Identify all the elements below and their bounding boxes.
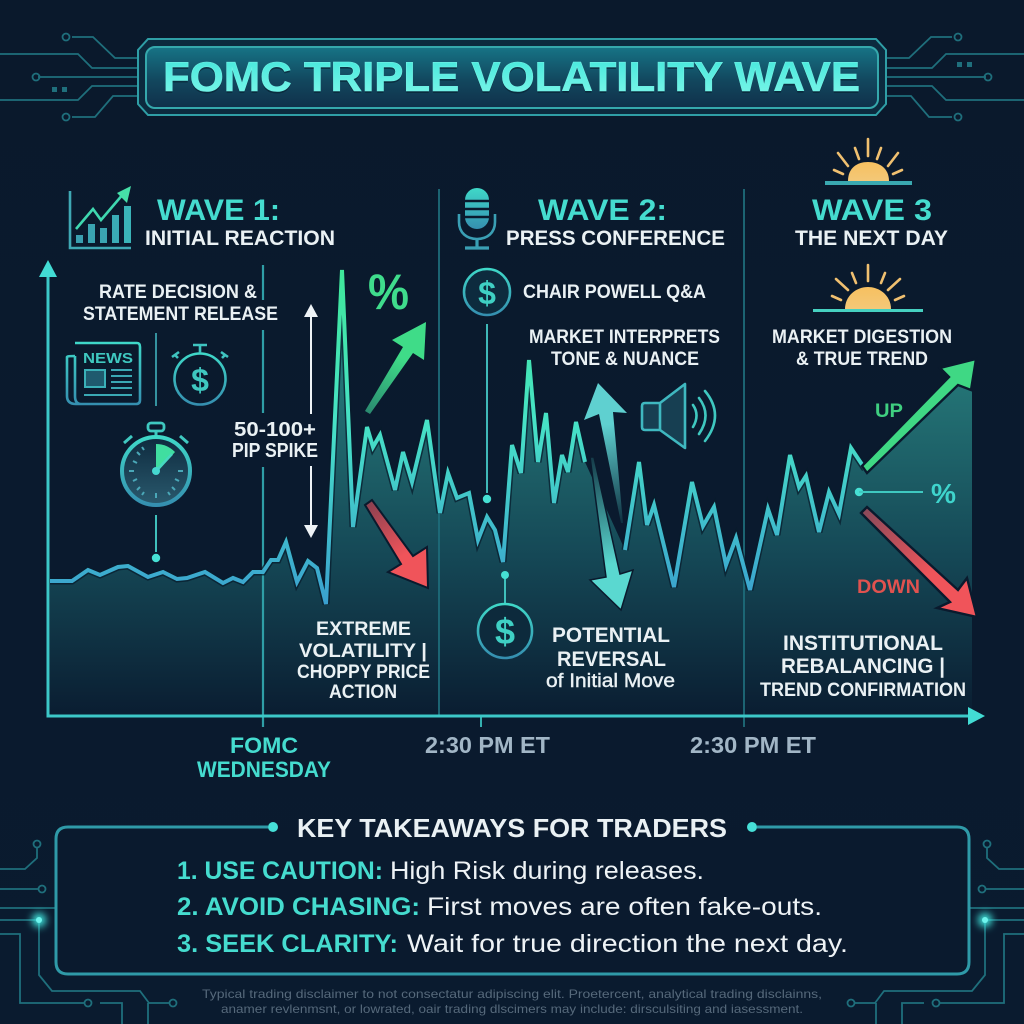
heading: wave 1: INITIAL REACTION	[145, 227, 335, 250]
icon: dollar coin wave 2	[464, 269, 510, 315]
icon: newspaper: NEWS	[83, 350, 133, 367]
icon: microphone	[459, 188, 495, 248]
text: extreme volatility: EXTREME	[316, 619, 411, 640]
heading: wave 3: WAVE 3	[812, 194, 932, 227]
heading: wave 1: WAVE 1:	[157, 194, 280, 227]
text: rate decision: STATEMENT RELEASE	[83, 304, 278, 325]
panel: key takeaways	[56, 813, 969, 974]
axis label: FOMC Wednesday	[197, 733, 331, 782]
arrow: red down wave 1	[365, 500, 428, 588]
price area fill	[50, 270, 972, 716]
takeaway 3: 3. SEEK CLARITY:	[177, 930, 398, 958]
title banner: FOMC TRIPLE VOLATILITY WAVE	[163, 55, 860, 102]
icon: dollar stopwatch	[172, 345, 228, 404]
heading: wave 1	[70, 186, 335, 250]
takeaway 1: High Risk during releases.	[390, 857, 704, 885]
percent symbol green: %	[368, 264, 409, 320]
takeaway 2	[177, 893, 822, 921]
bottom circuit traces	[0, 840, 1024, 1024]
text: potential reversal: POTENTIAL	[552, 624, 670, 647]
arrow: green up wave 1	[365, 322, 426, 414]
title banner	[138, 39, 886, 115]
icon: dollar coin lower	[478, 571, 532, 658]
text: rate decision	[83, 282, 278, 325]
arrow: teal up reversal	[584, 383, 627, 523]
text: extreme volatility: ACTION	[329, 682, 397, 703]
icon: dollar coin lower: $	[495, 611, 515, 652]
icon: dollar stopwatch: $	[191, 362, 209, 398]
disclaimer	[202, 987, 822, 1016]
text: extreme volatility: CHOPPY PRICE	[297, 662, 430, 683]
icon: rising sun lower	[813, 265, 923, 312]
text: institutional rebalancing: INSTITUTIONAL	[783, 632, 943, 655]
arrow: red down wave 3	[861, 507, 977, 617]
text: market interprets: MARKET INTERPRETS	[529, 327, 720, 348]
callout: percent marker	[855, 478, 956, 509]
annotation: pip spike: PIP SPIKE	[232, 440, 318, 462]
callout: percent marker: %	[931, 478, 956, 509]
disclaimer: anamer revlenmsnt, or lowrated, oair trading dlscimers may include: dirsculsiting and iasessment.	[221, 1002, 803, 1016]
icon: large stopwatch	[122, 423, 190, 505]
heading: wave 3	[795, 139, 948, 250]
takeaway 1	[177, 857, 704, 885]
takeaway 3	[177, 930, 848, 958]
heading: key takeaways: KEY TAKEAWAYS FOR TRADERS	[297, 813, 727, 843]
label: up: UP	[875, 401, 903, 422]
icon: rising sun top	[825, 139, 912, 185]
heading: wave 3: THE NEXT DAY	[795, 227, 948, 250]
text: potential reversal: REVERSAL	[557, 648, 666, 671]
takeaway 2: 2. AVOID CHASING:	[177, 893, 420, 921]
title circuit traces	[0, 34, 1024, 120]
text: extreme volatility: VOLATILITY |	[299, 641, 427, 662]
takeaway 2: First moves are often fake-outs.	[427, 893, 822, 921]
chart axes	[39, 260, 985, 725]
axis label: FOMC Wednesday: FOMC	[230, 733, 298, 758]
price line	[50, 270, 865, 604]
callout line: chair powell	[483, 324, 491, 503]
icon: dollar coin wave 2: $	[478, 275, 496, 311]
icon: newspaper	[67, 343, 140, 404]
text: chair powell: CHAIR POWELL Q&A	[523, 282, 706, 303]
label: down: DOWN	[857, 577, 920, 598]
text: institutional rebalancing	[760, 632, 966, 701]
arrow: teal down reversal	[590, 457, 633, 610]
takeaway 1: 1. USE CAUTION:	[177, 857, 383, 885]
text: market interprets	[529, 327, 720, 370]
annotation: pip spike: 50-100+	[234, 419, 316, 441]
icon: speaker	[642, 384, 715, 448]
icon: growth chart	[70, 186, 131, 248]
takeaway 3: Wait for true direction the next day.	[407, 930, 848, 958]
divider in rate decision	[155, 333, 157, 406]
text: institutional rebalancing: REBALANCING |	[781, 655, 945, 678]
heading: wave 2: WAVE 2:	[538, 194, 667, 227]
disclaimer: Typical trading disclaimer to not consectatur adipiscing elit. Proetercent, analytical trading disclainns,	[202, 987, 822, 1001]
text: market digestion: MARKET DIGESTION	[772, 327, 952, 348]
axis label: 2:30 PM ET first: 2:30 PM ET	[425, 732, 550, 758]
text: market interprets: TONE & NUANCE	[551, 349, 699, 370]
section divider lines	[263, 189, 744, 727]
axis label: 2:30 PM ET second: 2:30 PM ET	[690, 732, 816, 758]
callout line: stopwatch to chart	[152, 515, 160, 562]
title text: FOMC TRIPLE VOLATILITY WAVE	[163, 53, 860, 100]
heading: wave 2: PRESS CONFERENCE	[506, 227, 725, 250]
heading: wave 2	[459, 188, 725, 250]
text: rate decision: RATE DECISION &	[99, 282, 257, 303]
text: market digestion: & TRUE TREND	[796, 349, 928, 370]
text: institutional rebalancing: TREND CONFIRMATION	[760, 680, 966, 701]
text: extreme volatility	[297, 619, 430, 703]
text: market digestion	[772, 327, 952, 370]
text: potential reversal: of Initial Move	[546, 671, 675, 692]
axis label: FOMC Wednesday: WEDNESDAY	[197, 757, 331, 782]
arrow: green up wave 3	[862, 359, 976, 473]
annotation: pip spike	[232, 304, 318, 538]
text: potential reversal	[546, 624, 675, 692]
